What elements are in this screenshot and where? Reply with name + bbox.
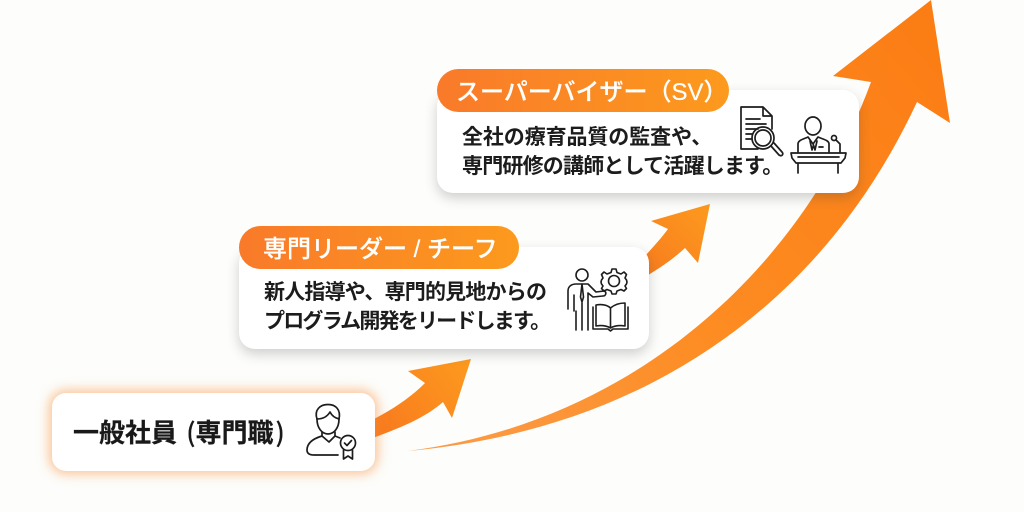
panel: specialist leader	[239, 247, 649, 349]
icon: person with badge	[306, 404, 356, 460]
icon: presenter with gear and book	[567, 268, 629, 332]
body text: supervisor: 全社の療育品質の監査や、	[462, 126, 712, 149]
body text: leader: プログラム開発をリードします。	[264, 310, 549, 333]
badge: supervisor: スーパーバイザー（SV）	[456, 79, 728, 106]
badge: specialist leader	[239, 226, 519, 269]
panel: general staff	[52, 393, 375, 471]
body text: leader	[264, 280, 549, 333]
badge: supervisor	[437, 69, 729, 112]
heading: general staff: 一般社員 (専門職)	[73, 413, 285, 450]
badge: specialist leader: 専門リーダー / チーフ	[263, 236, 498, 263]
body text: leader: 新人指導や、専門的見地からの	[264, 281, 546, 304]
body text: supervisor	[462, 126, 782, 178]
icon: document and magnifier	[740, 106, 784, 157]
panel: supervisor	[437, 90, 859, 193]
icon: speaker at podium	[790, 116, 847, 174]
body text: supervisor: 専門研修の講師として活躍します。	[462, 155, 782, 178]
